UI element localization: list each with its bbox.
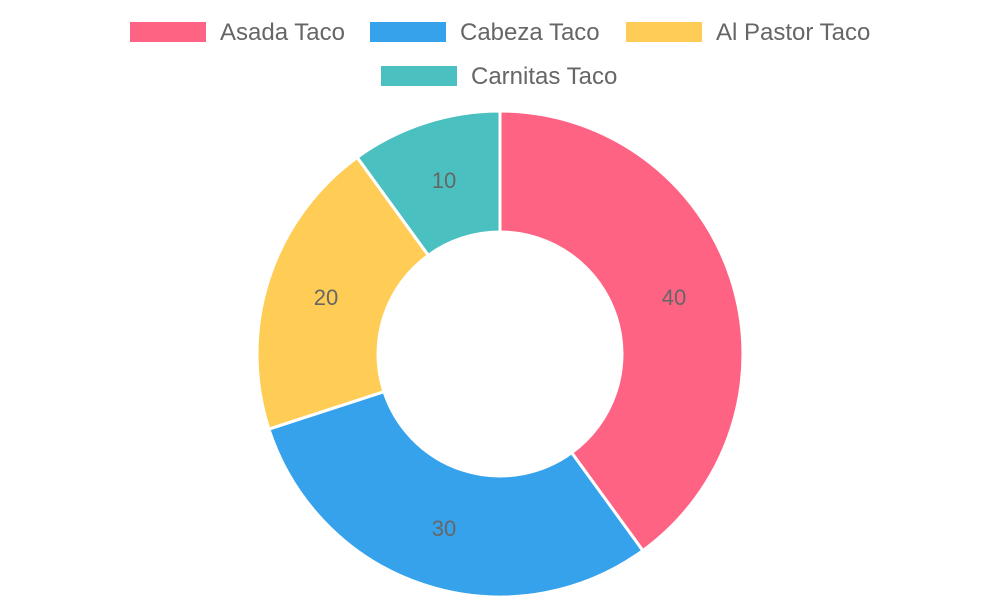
value labels: 40 — [662, 285, 686, 310]
value labels: 30 — [432, 516, 456, 541]
segment: Al Pastor 20 — [257, 157, 428, 429]
segment: Carnitas 10 — [357, 111, 500, 255]
legend item: Cabeza Taco — [370, 19, 600, 46]
segment: Asada 40 — [500, 111, 743, 551]
value labels: 20 — [314, 285, 338, 310]
legend — [130, 19, 870, 90]
segment: Cabeza 30 — [269, 392, 643, 597]
legend item: Al Pastor Taco: Al Pastor Taco — [716, 19, 870, 46]
legend item: Asada Taco — [130, 19, 345, 46]
doughnut chart — [257, 111, 743, 597]
value labels: 10 — [432, 168, 456, 193]
value labels — [314, 168, 686, 541]
legend item: Al Pastor Taco — [626, 19, 870, 46]
legend item: Asada Taco: Asada Taco — [220, 19, 345, 46]
legend item: Carnitas Taco: Carnitas Taco — [471, 63, 617, 90]
legend item: Carnitas Taco — [381, 63, 617, 90]
legend item: Cabeza Taco: Cabeza Taco — [460, 19, 600, 46]
